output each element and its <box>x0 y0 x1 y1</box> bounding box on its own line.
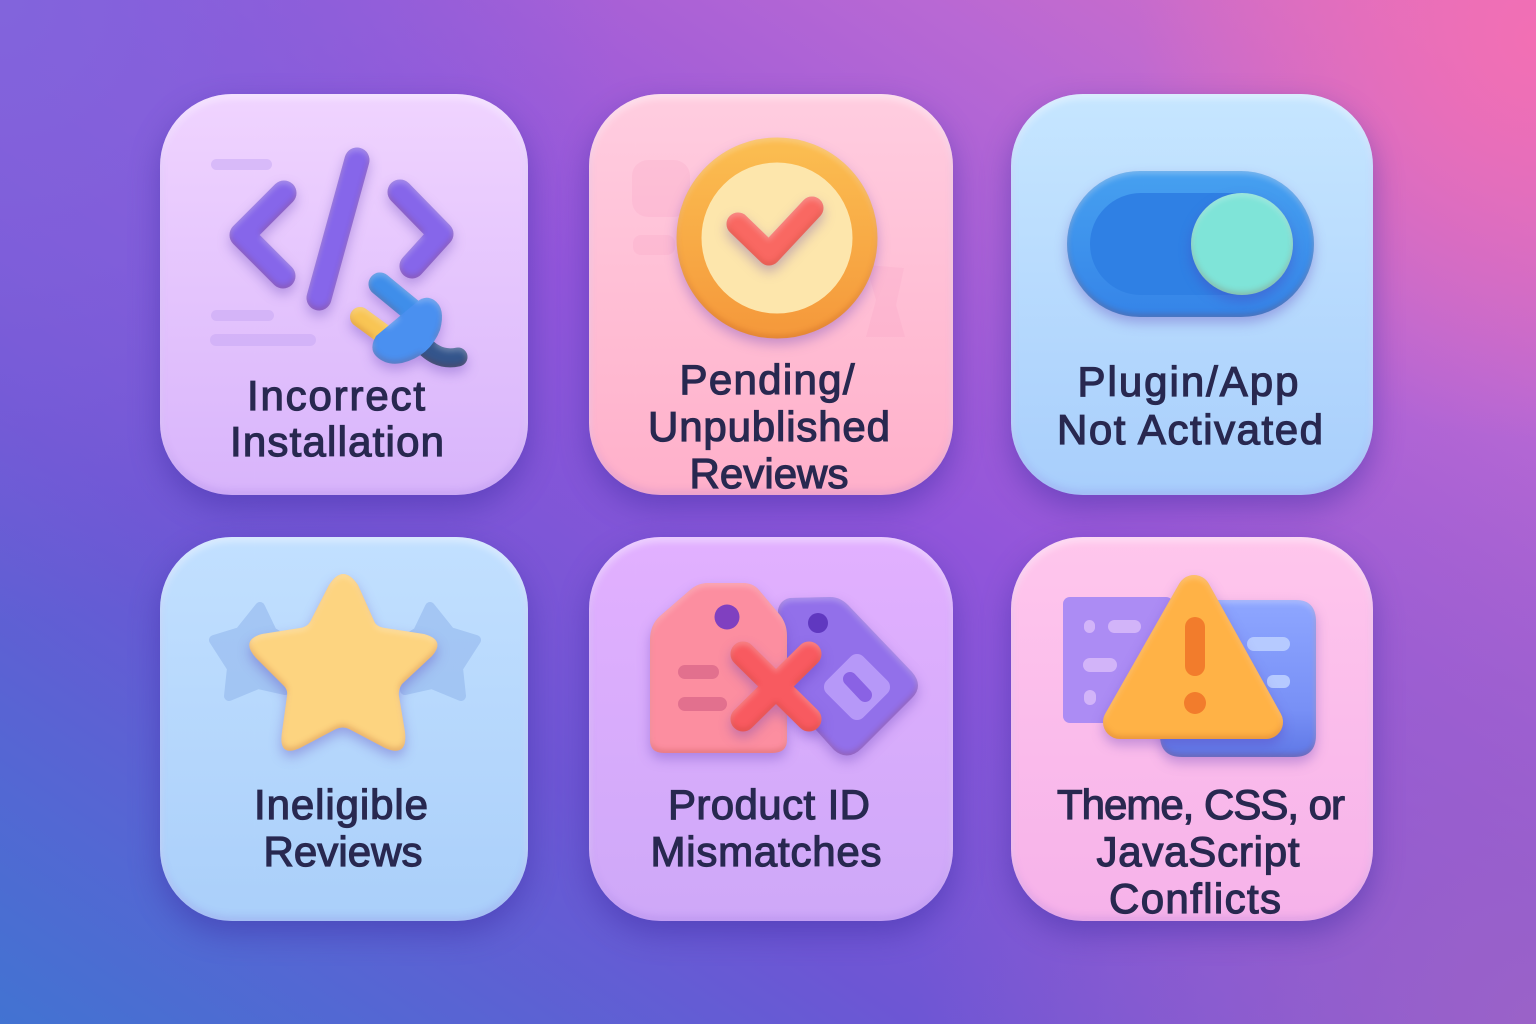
panel: incorrect installation <box>160 94 528 495</box>
label: Mismatches <box>650 828 882 875</box>
label: Plugin/App <box>1078 358 1298 405</box>
icon: check mark <box>738 208 812 254</box>
label: Not Activated <box>1057 406 1323 453</box>
icon: code brackets <box>242 160 441 298</box>
faint code lines <box>210 159 316 346</box>
panel: ineligible reviews <box>160 537 528 921</box>
label: Product ID <box>668 781 870 828</box>
icon: plug <box>360 284 458 364</box>
label <box>650 781 882 875</box>
label: Installation <box>230 418 444 465</box>
icon: toggle knob <box>1191 193 1293 295</box>
faint stars <box>214 607 476 696</box>
icon: clock check <box>689 150 865 326</box>
faint blobs <box>632 160 905 337</box>
label: Unpublished <box>648 403 890 450</box>
label <box>1057 781 1345 922</box>
label: JavaScript <box>1096 828 1300 875</box>
label <box>254 781 428 875</box>
label: Incorrect <box>247 372 425 419</box>
icon: pink tag <box>650 583 787 753</box>
icon: window lines <box>1247 637 1290 688</box>
label: Reviews <box>690 450 848 497</box>
panel: plugin not activated <box>1011 94 1373 495</box>
label: Ineligible <box>254 781 428 828</box>
icon: warning triangle <box>1120 592 1266 722</box>
label: Pending/ <box>680 356 855 403</box>
icon: toggle switch <box>1067 171 1314 317</box>
icon: star <box>249 574 437 751</box>
label: Conflicts <box>1109 875 1281 922</box>
label: Reviews <box>264 828 422 875</box>
icon: purple tag <box>778 597 918 756</box>
label <box>230 372 444 465</box>
icon: purple window <box>1063 597 1173 723</box>
label: Theme, CSS, or <box>1057 781 1345 828</box>
icon: red x <box>743 654 809 719</box>
panel: product id mismatches <box>589 537 953 921</box>
panel: theme conflicts <box>1011 537 1373 922</box>
panel: pending reviews <box>589 94 953 497</box>
label <box>648 356 890 497</box>
icon: blue window <box>1160 600 1316 757</box>
label <box>1057 358 1323 453</box>
